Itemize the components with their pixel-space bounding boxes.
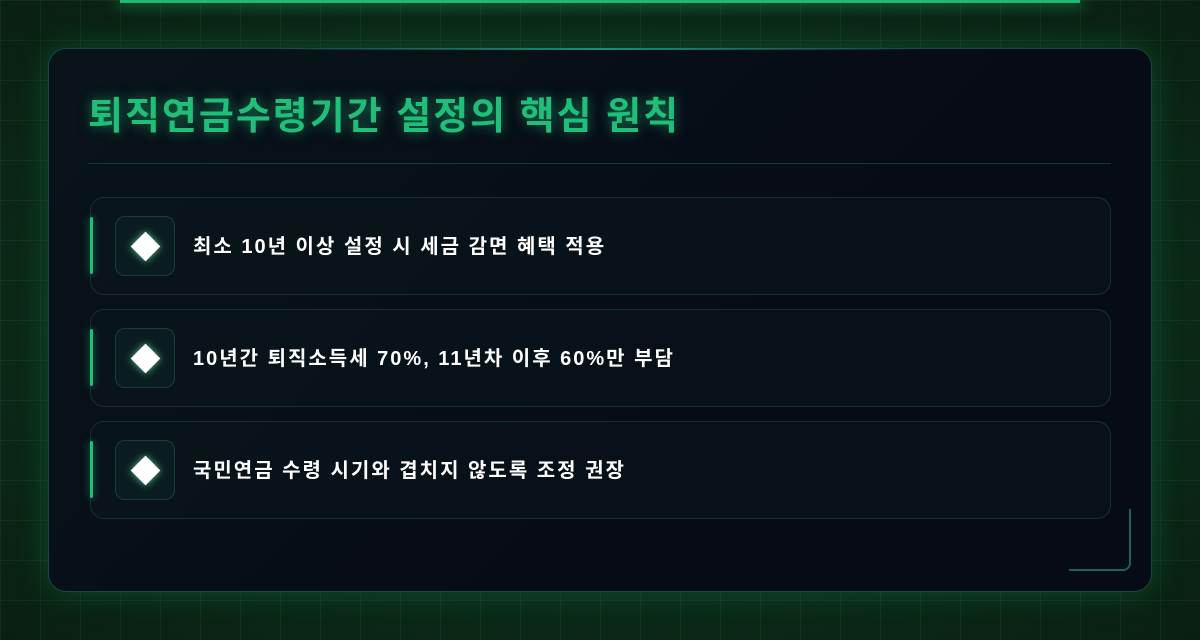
panel: main card (48, 48, 1152, 592)
icon: diamond (115, 440, 175, 500)
text 3: 국민연금 수령 시기와 겹치지 않도록 조정 권장 (193, 460, 626, 482)
text 1: 최소 10년 이상 설정 시 세금 감면 혜택 적용 (193, 236, 606, 258)
icon: diamond (115, 216, 175, 276)
icon: diamond (115, 328, 175, 388)
title: 퇴직연금수령기간 설정의 핵심 원칙 (88, 96, 680, 138)
corner accent (1069, 509, 1131, 571)
text 2: 10년간 퇴직소득세 70%, 11년차 이후 60%만 부담 (193, 348, 675, 370)
item 2 (90, 309, 1111, 407)
item 1 (90, 197, 1111, 295)
item 3 (90, 421, 1111, 519)
